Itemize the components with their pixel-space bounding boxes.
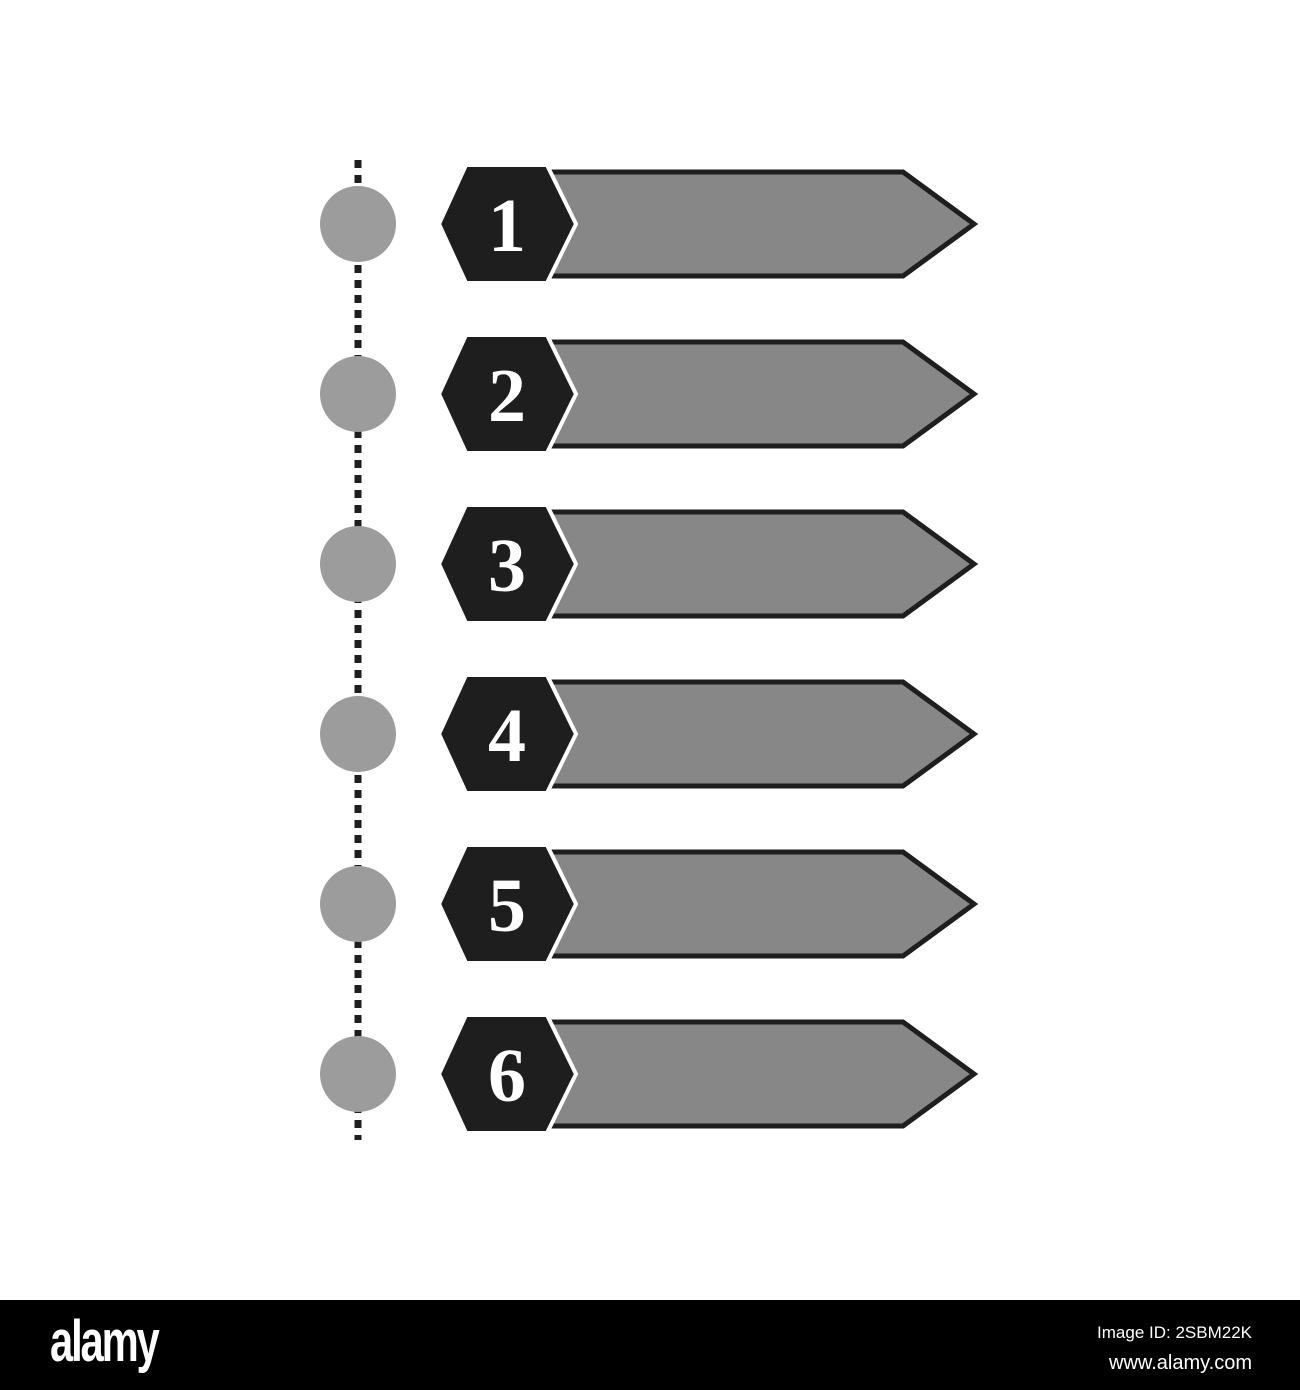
step 4 bbox=[320, 675, 974, 793]
logo: alamy bbox=[50, 1309, 158, 1374]
step 6: 6 bbox=[488, 1034, 526, 1118]
step 4: 4 bbox=[488, 694, 526, 778]
step 6 bbox=[320, 1015, 974, 1133]
image id bbox=[1097, 1323, 1252, 1374]
step 1 bbox=[320, 165, 974, 283]
step 3: 3 bbox=[488, 524, 526, 608]
step 3 bbox=[320, 505, 974, 623]
step 2: 2 bbox=[488, 354, 526, 438]
step 5: 5 bbox=[488, 864, 526, 948]
image id: www.alamy.com bbox=[1109, 1352, 1252, 1374]
step 2 bbox=[320, 335, 974, 453]
step 1: 1 bbox=[488, 184, 526, 268]
timeline dashed line bbox=[354, 160, 362, 1140]
image id: Image ID: 2SBM22K bbox=[1097, 1323, 1252, 1342]
footer bar bbox=[0, 1300, 1300, 1390]
step 5 bbox=[320, 845, 974, 963]
